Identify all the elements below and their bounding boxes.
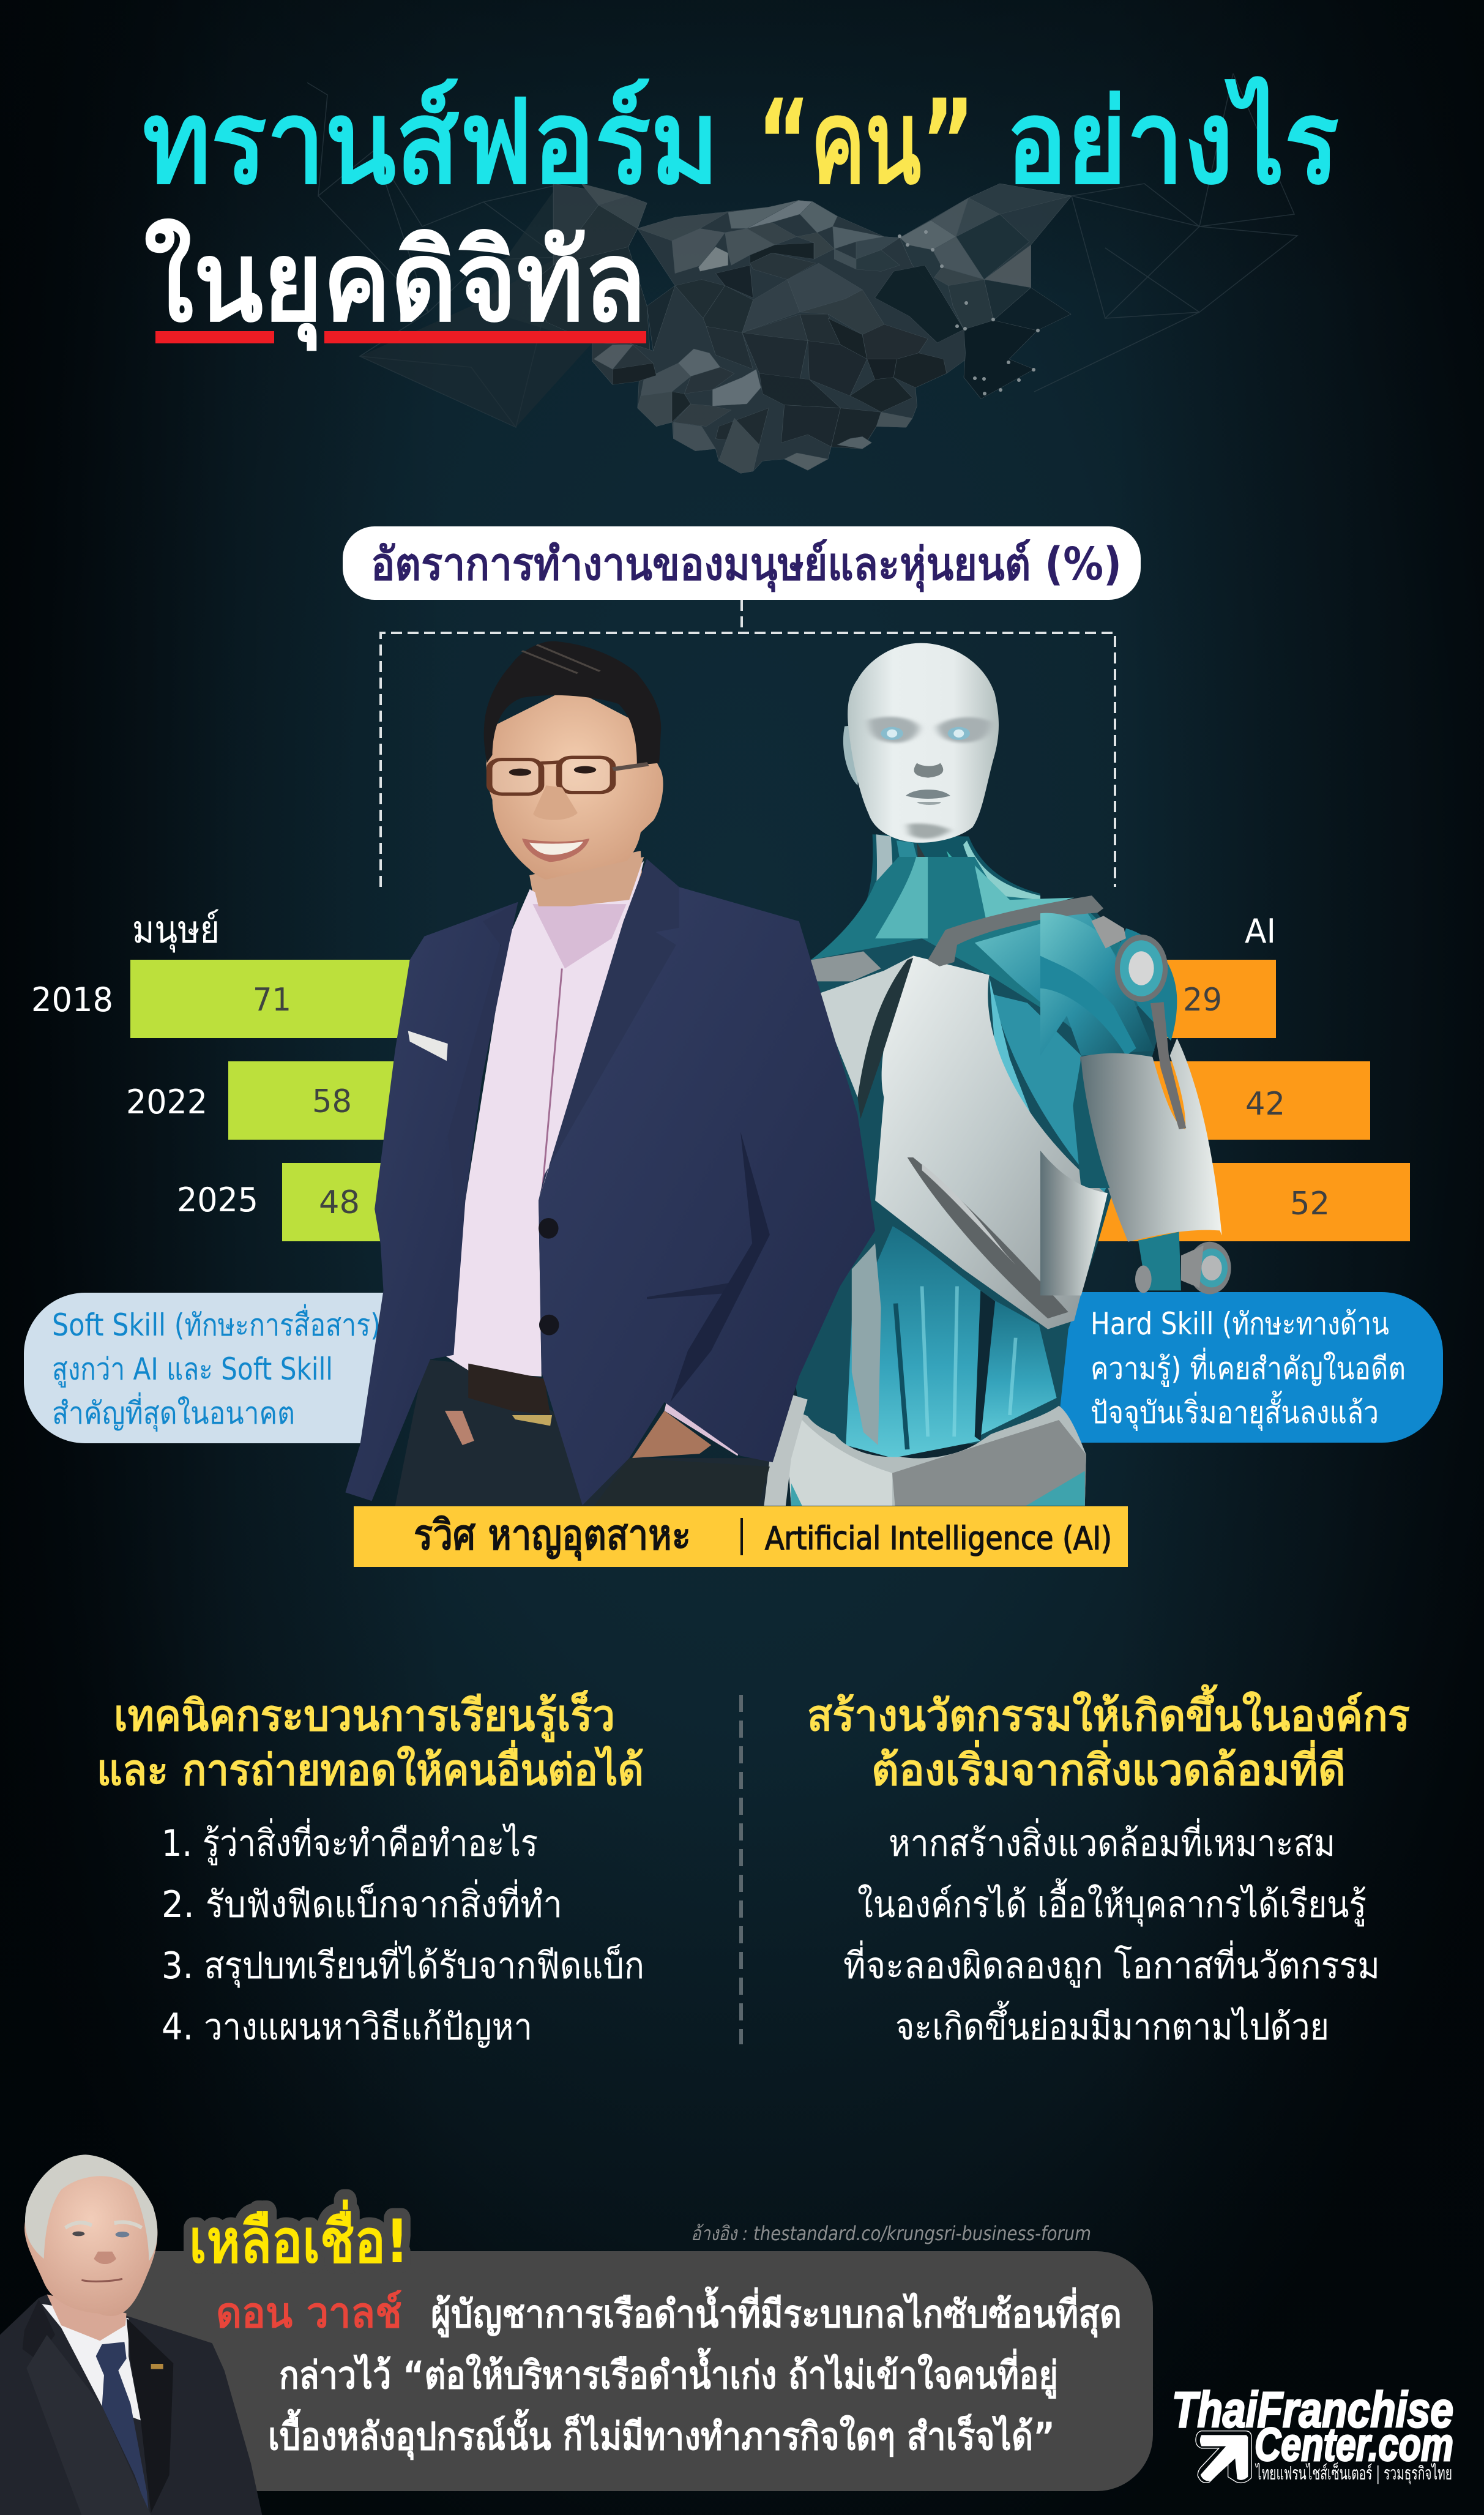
hands <box>445 1398 740 1458</box>
main silhouette <box>592 200 975 473</box>
section: innovation environment: ต้องเริ่มจากสิ่งแวดล้อมที่ดี <box>871 1740 1346 1795</box>
source reference: อ้างอิง : thestandard.co/krungsri-business-forum <box>691 2222 1091 2245</box>
quote panel: ผู้บัญชาการเรือดำน้ำที่มีระบบกลไกซับซ้อนที่สุด <box>431 2286 1122 2337</box>
bar chart: AI share: 42 <box>1245 1086 1285 1123</box>
bar chart: AI share <box>1067 960 1410 1241</box>
quote panel: ดอน วาลช์ <box>216 2289 402 2337</box>
belt and buckle <box>468 1364 552 1426</box>
bar chart: AI share: 29 <box>1183 982 1222 1018</box>
callout: hard skill: ปัจจุบันเริ่มอายุสั้นลงแล้ว <box>1091 1391 1379 1431</box>
column label: human: มนุษย์ <box>132 907 220 952</box>
photo: man in navy suit <box>345 641 875 1506</box>
robot hip plate <box>747 1389 1086 1506</box>
head and hair <box>484 641 663 936</box>
title: ในยุคดิจิทัล <box>144 217 646 351</box>
quote panel: กล่าวไว้ “ต่อให้บริหารเรือดำน้ำเก่ง ถ้าไม่เข้าใจคนที่อยู่ <box>279 2347 1058 2399</box>
chart heading pill <box>343 526 1141 600</box>
section: innovation environment: ที่จะลองผิดลองถูก โอกาสที่นวัตกรรม <box>843 1940 1380 1988</box>
title: อย่างไร <box>1006 75 1339 210</box>
column label: AI: AI <box>1245 912 1276 951</box>
robot head <box>843 643 999 843</box>
section: innovation environment: จะเกิดขึ้นย่อมมีมากตามไปด้วย <box>895 2000 1329 2049</box>
bar chart: human share: 71 <box>253 982 291 1018</box>
name banner <box>354 1506 1128 1567</box>
section: fast learning technique: 2. รับฟังฟีดแบ็กจากสิ่งที่ทำ <box>162 1879 562 1926</box>
section: innovation environment <box>807 1684 1410 2049</box>
illustration: low-poly handshake <box>307 73 1297 473</box>
right arm <box>900 184 1072 329</box>
icon: arrow <box>1196 2431 1251 2483</box>
section: fast learning technique: 4. วางแผนหาวิธีแก้ปัญหา <box>162 2006 532 2049</box>
dashed connector bracket <box>381 600 1115 887</box>
section: fast learning technique: เทคนิคกระบวนการเรียนรู้เร็ว <box>114 1689 615 1743</box>
shirt <box>430 857 644 1377</box>
section: innovation environment: สร้างนวัตกรรมให้เกิดขึ้นในองค์กร <box>807 1684 1410 1741</box>
bar chart: human share: 2018 <box>31 981 113 1019</box>
logo: ThaiFranchise Center <box>1172 2382 1453 2485</box>
jeans <box>395 1359 770 1506</box>
bar chart: AI share: 52 <box>1290 1186 1330 1222</box>
bar chart: human share <box>31 960 424 1241</box>
callout: soft skill: สำคัญที่สุดในอนาคต <box>52 1392 295 1432</box>
left forearm <box>553 184 647 265</box>
bar chart: human share: 58 <box>312 1083 352 1120</box>
callout: hard skill: ความรู้) ที่เคยสำคัญในอดีต <box>1091 1348 1406 1387</box>
suit jacket <box>345 859 875 1505</box>
quote panel <box>86 2199 1153 2491</box>
title <box>143 75 1339 351</box>
robot arm <box>1040 913 1231 1295</box>
quote panel: เหลือเชื่อ! <box>189 2199 409 2277</box>
bar chart: human share: 2025 <box>177 1181 258 1219</box>
robot neck <box>848 834 1040 936</box>
name banner: รวิศ หาญอุตสาหะ <box>414 1511 691 1561</box>
bar chart: human share: 2022 <box>126 1083 207 1121</box>
section: innovation environment: ในองค์กรได้ เอื้อให้บุคลากรได้เรียนรู้ <box>857 1878 1367 1927</box>
section: fast learning technique: 3. สรุปบทเรียนที่ได้รับจากฟีดแบ็ก <box>162 1940 644 1988</box>
section: innovation environment: หากสร้างสิ่งแวดล้อมที่เหมาะสม <box>889 1818 1335 1865</box>
section: fast learning technique: 1. รู้ว่าสิ่งที่จะทำคือทำอะไร <box>162 1818 538 1866</box>
section: fast learning technique <box>97 1689 644 2049</box>
callout: hard skill <box>1016 1292 1443 1443</box>
robot torso <box>781 857 1168 1458</box>
callout: hard skill: Hard Skill (ทักษะทางด้าน <box>1091 1306 1389 1342</box>
photo: Don Walsh <box>0 2154 262 2515</box>
title: ทรานส์ฟอร์ม <box>143 75 719 210</box>
bar chart: human share: 48 <box>319 1184 360 1221</box>
name banner: Artificial Intelligence (AI) <box>765 1520 1112 1557</box>
callout: soft skill: สูงกว่า AI และ Soft Skill <box>52 1351 333 1388</box>
chart heading pill: อัตราการทำงานของมนุษย์และหุ่นยนต์ (%) <box>371 538 1122 592</box>
title: “คน” <box>757 75 975 210</box>
callout: soft skill <box>24 1293 392 1443</box>
callout: soft skill: Soft Skill (ทักษะการสื่อสาร) <box>52 1304 381 1343</box>
illustration: robot <box>747 643 1231 1506</box>
section: fast learning technique: และ การถ่ายทอดให้คนอื่นต่อได้ <box>97 1740 644 1795</box>
quote panel: เบื้องหลังอุปกรณ์นั้น ก็ไม่มีทางทำภารกิจใดๆ สำเร็จได้” <box>268 2408 1055 2460</box>
